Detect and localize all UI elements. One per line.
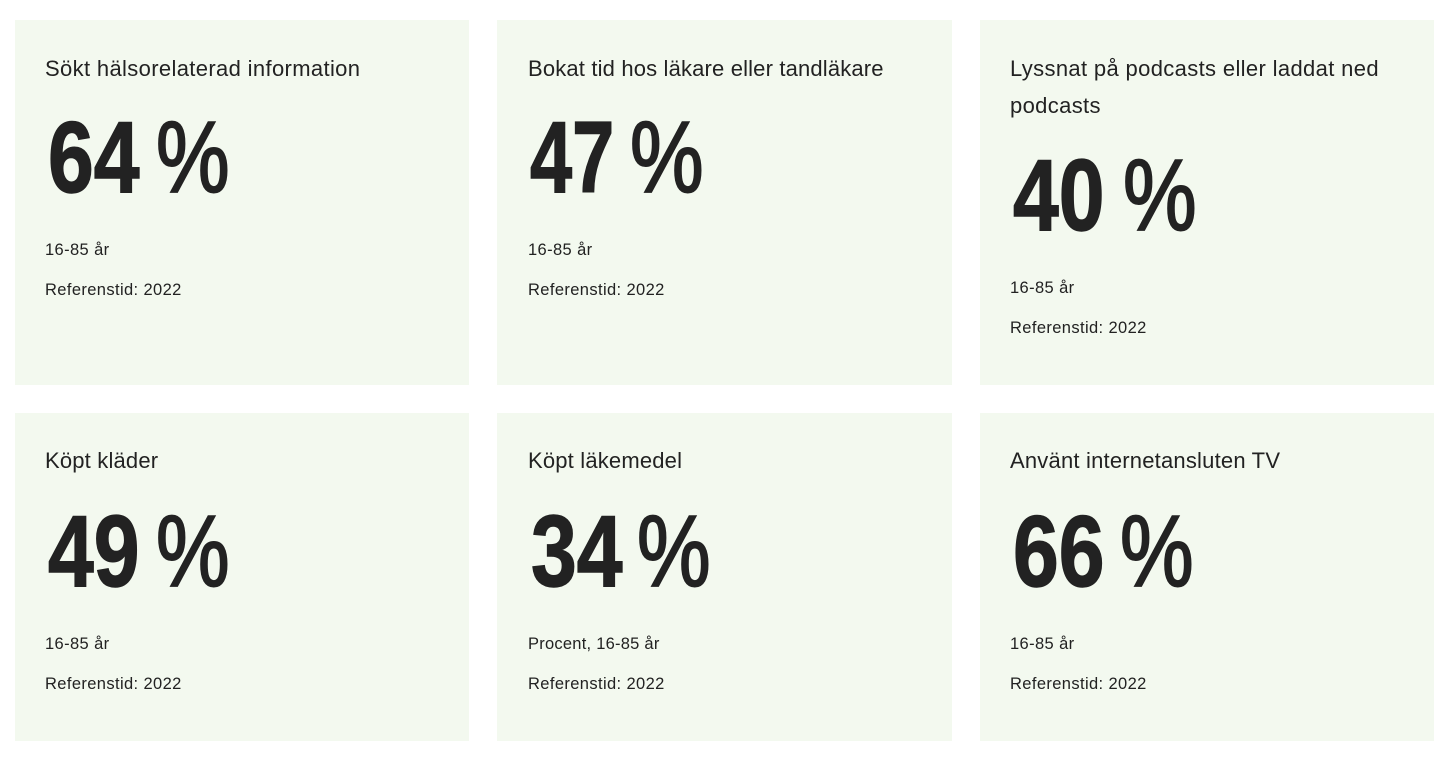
heading: Sökt hälsorelaterad information xyxy=(45,56,360,80)
value: 64 % xyxy=(48,102,230,214)
panel: Köpt läkemedel xyxy=(497,413,952,741)
heading: Köpt kläder xyxy=(45,448,158,473)
age range: Procent, 16-85 år xyxy=(528,635,660,653)
reference period: Referenstid: 2022 xyxy=(528,675,665,693)
heading: Använt internetansluten TV xyxy=(1010,448,1280,473)
age range: 16-85 år xyxy=(45,635,110,653)
panel: Bokat tid hos läkare eller tandläkare xyxy=(497,20,952,385)
heading: Köpt läkemedel xyxy=(528,448,682,473)
value: 34 %: % xyxy=(637,496,711,608)
age range: 16-85 år xyxy=(1010,279,1074,297)
value: 49 % xyxy=(48,496,230,608)
value: 49 %: 49 xyxy=(48,496,140,608)
age range: 16-85 år xyxy=(528,241,592,259)
value: 40 % xyxy=(1013,140,1197,252)
reference period: Referenstid: 2022 xyxy=(45,281,182,299)
value: 66 % xyxy=(1013,496,1194,608)
value: 66 %: % xyxy=(1120,496,1194,608)
reference period: Referenstid: 2022 xyxy=(1010,675,1147,693)
heading: Bokat tid hos läkare eller tandläkare xyxy=(528,56,884,80)
value: 47 %: % xyxy=(630,102,704,214)
panel: Lyssnat på podcasts eller laddat ned podcasts xyxy=(980,20,1434,385)
value: 47 % xyxy=(530,102,704,214)
value: 49 %: % xyxy=(156,496,230,608)
panel: Använt internetansluten TV xyxy=(980,413,1434,741)
heading: Lyssnat på podcasts eller laddat ned podcasts xyxy=(1010,56,1379,118)
age range: 16-85 år xyxy=(1010,635,1074,653)
value: 47 %: 47 xyxy=(530,102,614,214)
value: 34 %: 34 xyxy=(531,496,623,608)
panel: Sökt hälsorelaterad information xyxy=(15,20,469,385)
value: 66 %: 66 xyxy=(1013,496,1105,608)
panel: Köpt kläder xyxy=(15,413,469,741)
reference period: Referenstid: 2022 xyxy=(528,281,665,299)
reference period: Referenstid: 2022 xyxy=(1010,319,1147,337)
value: 64 %: 64 xyxy=(48,102,140,214)
value: 34 % xyxy=(531,496,711,608)
value: 40 %: 40 xyxy=(1013,140,1105,252)
value: 64 %: % xyxy=(156,102,230,214)
value: 40 %: % xyxy=(1123,140,1197,252)
reference period: Referenstid: 2022 xyxy=(45,675,182,693)
age range: 16-85 år xyxy=(45,241,110,259)
